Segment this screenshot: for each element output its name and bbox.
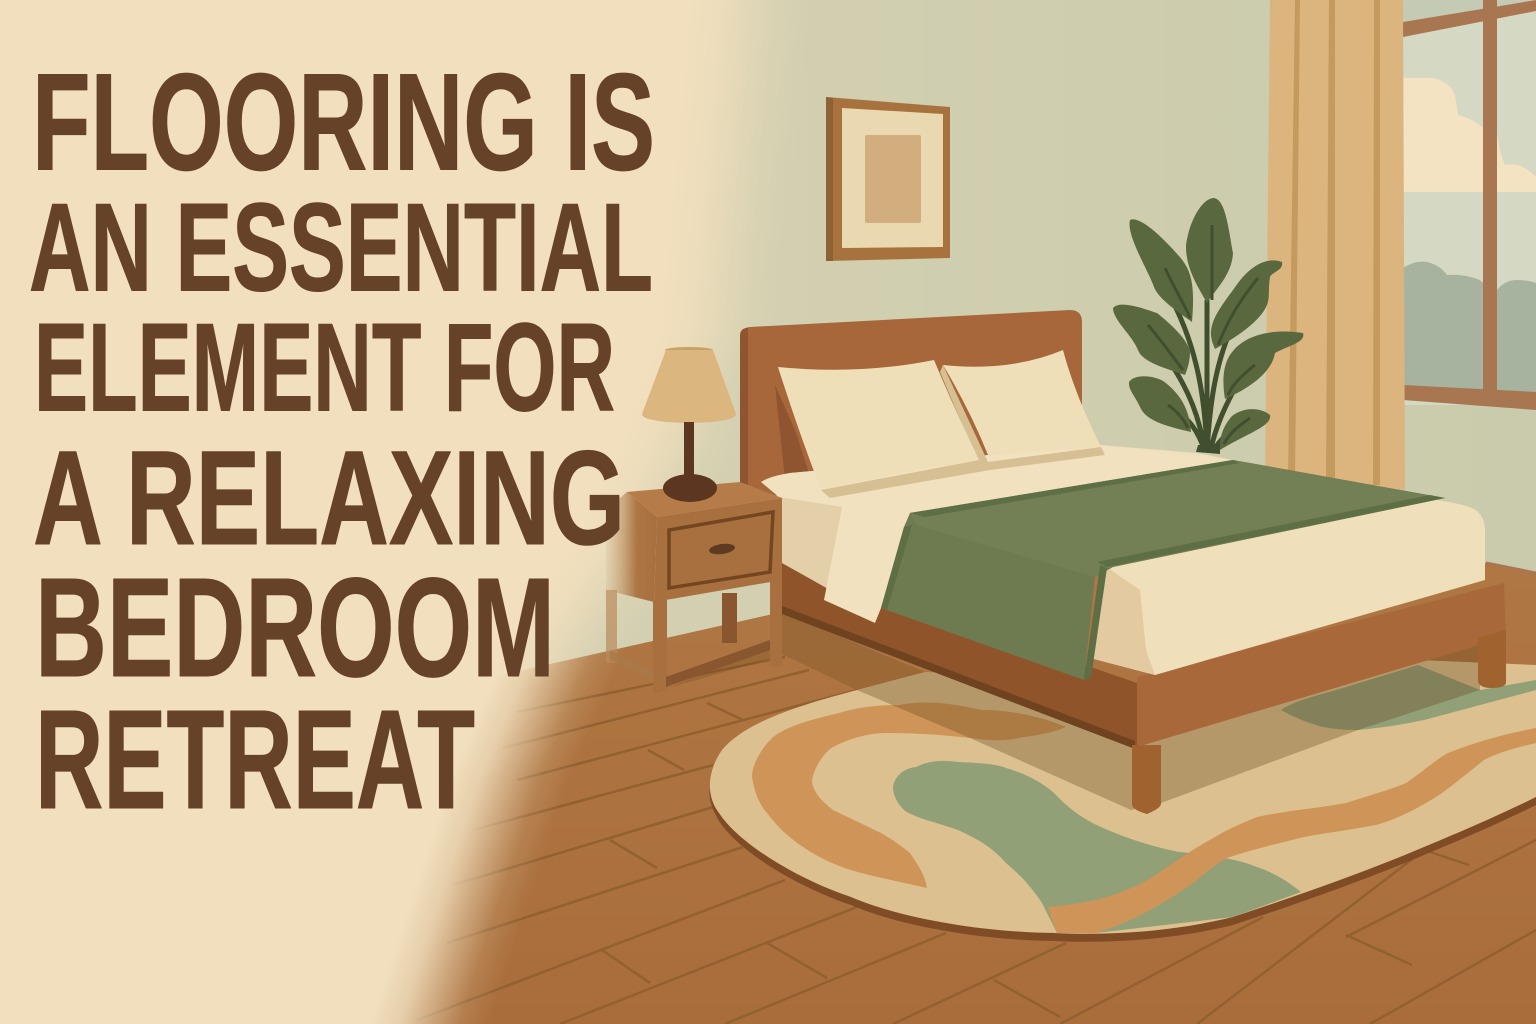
rug green shape right <box>1281 665 1536 730</box>
rug orange band left <box>752 703 1066 888</box>
wood floor <box>300 480 1536 1024</box>
rug green shape <box>893 761 1301 933</box>
bed sheet fold <box>761 445 1233 623</box>
headboard <box>740 310 1082 500</box>
back leg right <box>722 593 737 643</box>
rug base <box>710 660 1536 934</box>
nightstand <box>606 482 782 694</box>
pillow shadow <box>821 447 1105 498</box>
title <box>29 46 655 838</box>
title line 1: FLOORING IS <box>32 46 655 200</box>
pillow left <box>778 360 979 490</box>
rug orange band right <box>1048 728 1536 933</box>
front legs <box>653 600 667 694</box>
front leg <box>1132 745 1161 814</box>
side panel <box>606 492 657 602</box>
cream fade panel <box>0 0 810 1024</box>
mattress top and front <box>761 445 1485 675</box>
front <box>654 498 782 602</box>
green blanket <box>881 460 1445 680</box>
floor shadow beside bed <box>668 612 925 690</box>
bed <box>740 310 1506 814</box>
lower shelf rail <box>666 640 770 687</box>
bed shadow on rug <box>857 640 1480 810</box>
window <box>1403 0 1536 410</box>
back leg left <box>606 590 617 663</box>
mattress side <box>782 497 842 590</box>
knob <box>708 542 736 556</box>
title line 6: RETREAT <box>35 680 475 838</box>
plant <box>1113 198 1303 454</box>
curtain <box>1265 0 1405 490</box>
wall art <box>826 97 950 261</box>
title line 4: A RELAXING <box>33 424 625 573</box>
table lamp <box>642 347 736 502</box>
rug edge shadow <box>709 786 1536 942</box>
foot rail <box>1137 583 1506 747</box>
top <box>627 482 782 517</box>
right leg <box>1478 630 1506 688</box>
mattress corner shade <box>1090 567 1155 675</box>
side rail <box>782 560 1137 747</box>
drawer <box>669 512 773 588</box>
title line 2: AN ESSENTIAL <box>29 178 653 318</box>
pillow right <box>943 350 1101 455</box>
title line 3: ELEMENT FOR <box>34 298 615 438</box>
rug <box>709 640 1536 942</box>
title line 5: BEDROOM <box>35 548 555 706</box>
